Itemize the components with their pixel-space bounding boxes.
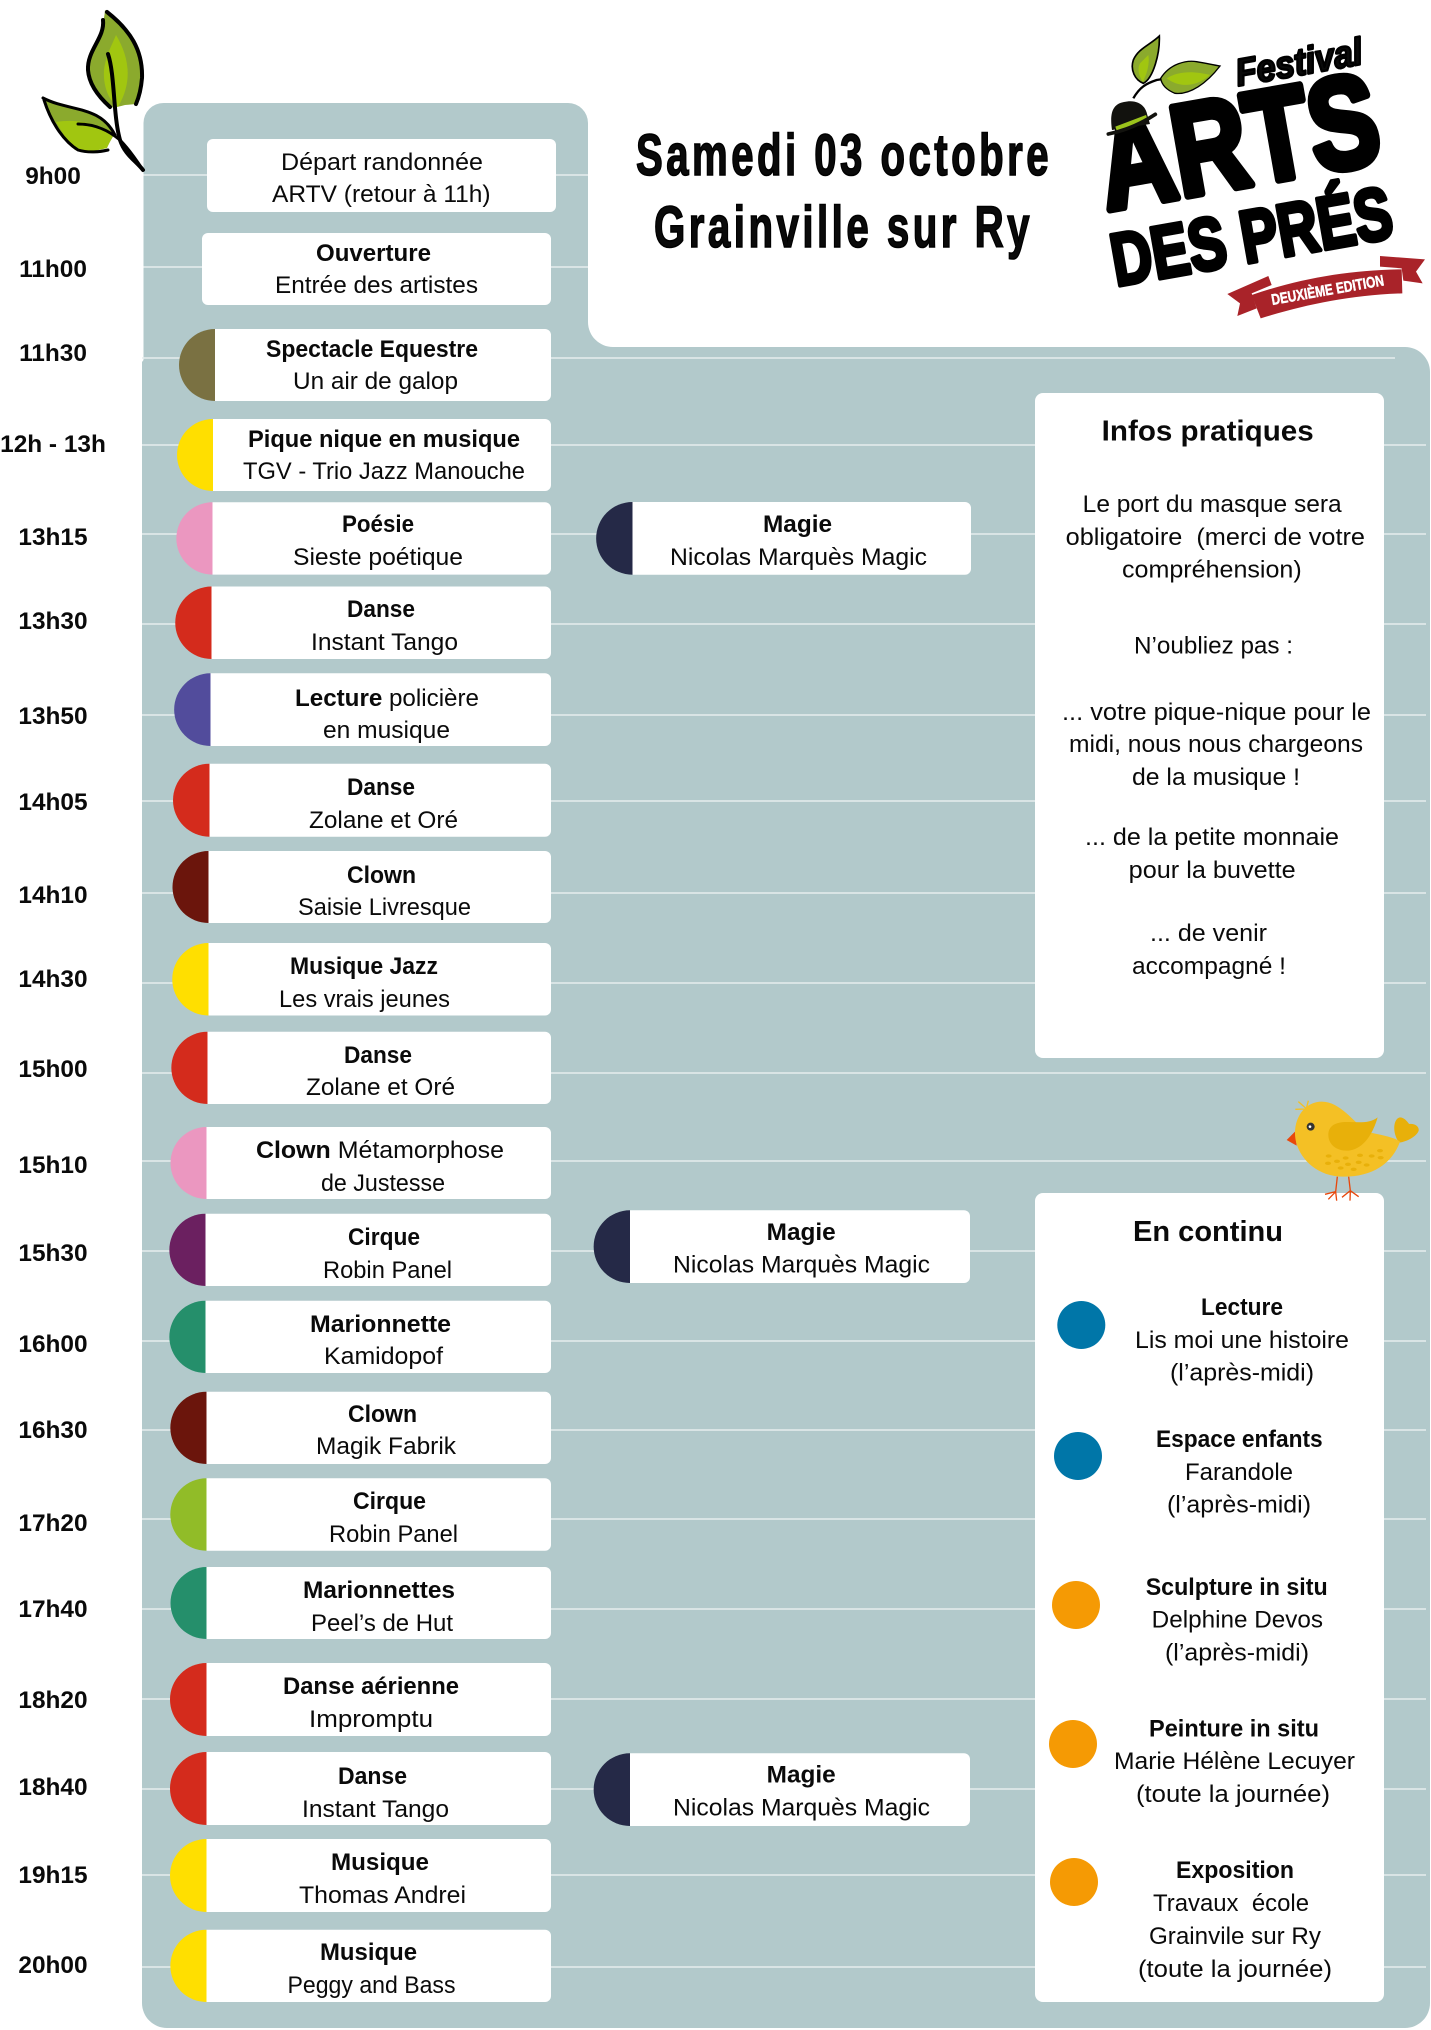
item: Exposition: Grainvile sur Ry [1149,1923,1321,1950]
time labels: 15h10 [18,1152,88,1179]
event: Clown Saisie Livresque: Saisie Livresque [298,894,471,921]
event: Magie 18h40: Magie [767,1762,836,1789]
event: Danse Zolane et Oré 15h00: Danse [344,1042,412,1069]
item: Espace enfants: Espace enfants [1156,1426,1323,1453]
logo: Festival Arts des Prés: Festival [1232,31,1367,95]
time labels: 13h30 [18,608,88,635]
event: Marionnette: Marionnette [310,1311,451,1338]
event: Danse Instant Tango: Instant Tango [311,629,458,656]
event: Danse Instant Tango [175,586,551,659]
event: Clown Magik Fabrik: Magik Fabrik [316,1433,457,1460]
item: Exposition [1050,1857,1332,1983]
event: Clown Saisie Livresque [172,851,551,923]
icon: leaves top left [43,10,143,170]
event: Musique Jazz: Les vrais jeunes [279,986,450,1013]
event: Cirque Robin Panel 15h30: Robin Panel [323,1257,452,1284]
event: Danse aérienne: Impromptu [309,1706,433,1733]
item: Peinture in situ: (toute la journée) [1136,1781,1330,1808]
text: pique-nique: midi, nous nous chargeons [1069,731,1363,758]
event: Spectacle Equestre: Un air de galop [293,368,458,395]
time labels: 11h30 [19,340,87,367]
item: Espace enfants [1054,1426,1323,1519]
text: petite monnaie: pour la buvette [1129,857,1296,884]
event: Magie 15h30 [594,1210,970,1283]
time labels: 15h00 [18,1056,88,1083]
text: petite monnaie: ... de la petite monnaie [1085,824,1339,851]
event: Poésie: Poésie [342,511,414,538]
time labels: 16h30 [18,1417,88,1444]
event: Cirque Robin Panel 17h20: Robin Panel [329,1521,458,1548]
item: Peinture in situ: Peinture in situ [1149,1716,1319,1743]
event: Ouverture [202,233,551,305]
item: Sculpture in situ [1052,1574,1328,1667]
item: Lecture [1057,1294,1349,1387]
item: Exposition: Exposition [1176,1857,1294,1884]
event: Clown Magik Fabrik: Clown [348,1401,417,1428]
item: Peinture in situ [1049,1716,1355,1808]
time labels: 18h40 [18,1774,88,1801]
event: Pique nique en musique [177,419,551,491]
time labels: 19h15 [18,1862,88,1889]
item: Sculpture in situ: Sculpture in situ [1146,1574,1328,1601]
text: masque: obligatoire (merci de votre [1066,524,1365,551]
event: Départ randonnée [207,139,556,212]
logo: Festival Arts des Prés: DEUXIÈME EDITION [1270,272,1385,309]
event: Marionnette [169,1301,551,1373]
time labels: 13h15 [18,524,88,551]
time labels: 20h00 [18,1952,88,1979]
event: Cirque Robin Panel 17h20: Cirque [353,1488,426,1515]
text: venir accompagné [1132,920,1286,980]
time labels: 14h30 [18,966,88,993]
event: Départ randonnée: ARTV (retour à 11h) [272,181,491,208]
event: Marionnettes: Marionnettes [303,1577,455,1604]
event: Magie 15h30: Nicolas Marquès Magic [673,1252,930,1279]
text: pique-nique: de la musique ! [1132,764,1300,791]
time labels: 16h00 [18,1331,88,1358]
event: Lecture policière [174,673,551,746]
event: Danse Instant Tango: Danse [347,596,415,623]
event: Marionnettes [170,1567,551,1639]
event: Ouverture: Entrée des artistes [275,272,478,299]
item: Espace enfants: Farandole [1185,1459,1293,1486]
item: Exposition: Travaux école [1153,1890,1309,1917]
event: Musique Peggy and Bass: Peggy and Bass [288,1972,456,1999]
event: Clown Métamorphose: Clown Métamorphose [256,1137,504,1164]
event: Clown Métamorphose: de Justesse [321,1170,445,1197]
text: masque: compréhension) [1122,557,1302,584]
time labels: 14h10 [18,882,88,909]
event: Magie 13h15: Magie [763,511,832,538]
text: N'oubliez pas: N’oubliez pas : [1134,633,1293,660]
time labels: 17h40 [18,1596,88,1623]
title: Grainville sur Ry [654,195,1033,260]
event: Musique Peggy and Bass [170,1930,551,2002]
event: Musique Jazz [172,943,551,1016]
time labels: 18h20 [18,1687,88,1714]
time labels: 14h05 [18,789,88,816]
event: Danse Zolane et Oré 15h00 [171,1032,551,1104]
item: Exposition: (toute la journée) [1138,1956,1332,1983]
event: Cirque Robin Panel 15h30: Cirque [348,1224,420,1251]
event: Musique Thomas Andrei: Thomas Andrei [299,1882,466,1909]
time labels: 12h - 13h [0,431,106,458]
panel: Infos pratiques [1035,393,1384,1058]
time labels: 15h30 [18,1240,88,1267]
event: Danse Zolane et Oré: Danse [347,774,415,801]
event: Pique nique en musique: Pique nique en musique [248,426,520,453]
text: pique-nique [1062,699,1371,791]
heading: En continu: En continu [1133,1216,1283,1248]
event: Clown Saisie Livresque: Clown [347,862,416,889]
text: masque [1066,491,1365,584]
event: Danse Zolane et Oré [173,764,551,837]
event: Magie 13h15: Nicolas Marquès Magic [670,544,927,571]
event: Lecture policière: en musique [323,717,450,744]
item: Peinture in situ: Marie Hélène Lecuyer [1114,1748,1355,1775]
event: Danse aérienne [170,1663,551,1736]
event: Clown Métamorphose [170,1127,551,1199]
event: Cirque Robin Panel 17h20 [170,1478,551,1551]
panel: En continu [1035,1193,1384,2002]
text: venir accompagné: accompagné ! [1132,953,1286,980]
icon: yellow bird [1287,1101,1419,1201]
time labels [0,163,106,1979]
item: Lecture: Lecture [1201,1294,1283,1321]
event: Clown Magik Fabrik [170,1392,551,1464]
event: Musique Jazz: Musique Jazz [290,953,438,980]
event: Magie 15h30: Magie [767,1219,836,1246]
heading: Infos pratiques: Infos pratiques [1102,416,1314,448]
text: masque: Le port du masque sera [1083,491,1342,518]
event: Danse Instant Tango 18h40 [170,1752,551,1825]
event: Spectacle Equestre: Spectacle Equestre [266,336,478,363]
event: Musique Thomas Andrei [170,1839,551,1912]
item: Lecture: Lis moi une histoire [1135,1327,1349,1354]
item: Espace enfants: (l’après-midi) [1167,1492,1311,1519]
event: Poésie [176,502,551,575]
event: Danse Zolane et Oré: Zolane et Oré [309,807,458,834]
event: Spectacle Equestre [179,329,551,401]
event: Marionnette: Kamidopof [324,1343,443,1370]
event: Départ randonnée: Départ randonnée [281,149,483,176]
text: venir accompagné: ... de venir [1150,920,1267,947]
event: Danse Zolane et Oré 15h00: Zolane et Oré [306,1074,455,1101]
event: Lecture policière: Lecture policière [295,685,479,712]
time labels: 9h00 [25,163,81,190]
time labels: 17h20 [18,1510,88,1537]
title [636,123,1052,260]
event: Pique nique en musique: TGV - Trio Jazz Manouche [243,458,525,485]
item: Sculpture in situ: Delphine Devos [1152,1607,1323,1634]
event: Magie 13h15 [596,502,971,575]
event: Poésie: Sieste poétique [293,544,463,571]
text: pique-nique: ... votre pique-nique pour le [1062,699,1371,726]
time labels: 13h50 [18,703,88,730]
event: Danse Instant Tango 18h40: Danse [338,1763,407,1790]
event: Musique Thomas Andrei: Musique [331,1849,429,1876]
event: Marionnettes: Peel’s de Hut [311,1610,453,1637]
event: Danse Instant Tango 18h40: Instant Tango [302,1796,449,1823]
item: Sculpture in situ: (l’après-midi) [1165,1640,1309,1667]
event: Ouverture: Ouverture [316,240,431,267]
event: Cirque Robin Panel 15h30 [169,1214,551,1286]
event: Magie 18h40 [594,1753,970,1826]
event: Magie 18h40: Nicolas Marquès Magic [673,1794,930,1821]
item: Lecture: (l’après-midi) [1170,1360,1314,1387]
event: Danse aérienne: Danse aérienne [283,1673,459,1700]
text: petite monnaie [1085,824,1339,884]
time labels: 11h00 [19,256,87,283]
event: Musique Peggy and Bass: Musique [320,1939,417,1966]
title: Samedi 03 octobre [636,123,1052,188]
